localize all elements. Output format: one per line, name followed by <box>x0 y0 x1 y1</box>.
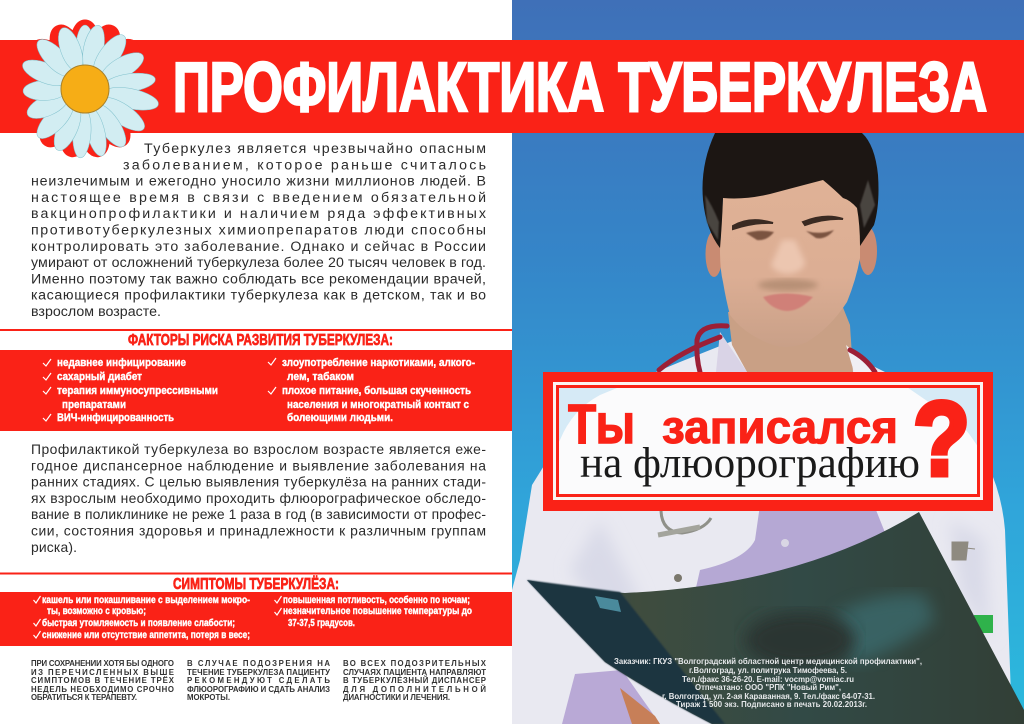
imprint footer: Тел./факс 36-26-20. E-mail: vocmp@vomiac.ru <box>682 675 854 684</box>
risk factors right column: лем, табаком <box>287 371 354 383</box>
advice column 2: В СЛУЧАЕ ПОДОЗРЕНИЯ НА <box>187 659 330 668</box>
hair highlight <box>705 180 875 240</box>
prevention text block: годное диспансерное наблюдение и выявление заболевания на <box>31 457 486 473</box>
symptoms right column: повышенная потливость, особенно по ночам; <box>283 594 470 606</box>
face <box>720 170 860 347</box>
prevention text block: сии, состояния здоровья и принадлежности к различным группам <box>31 522 486 538</box>
intro text block: настоящее время в связи с введением обязательной <box>31 190 486 206</box>
imprint footer <box>614 657 922 709</box>
film label <box>595 596 621 612</box>
risk factors right column <box>282 357 475 424</box>
eye left <box>746 231 774 240</box>
risk factors left column: сахарный диабет <box>57 371 143 383</box>
shirt button <box>781 539 789 547</box>
ear left <box>706 231 722 277</box>
doctor photo illustration <box>512 133 1024 724</box>
header band <box>0 40 1024 133</box>
x-ray ribs <box>835 594 935 665</box>
prevention text block <box>31 441 486 555</box>
nose <box>771 240 805 274</box>
icon: daisy <box>19 23 160 158</box>
symptoms right column: 37-37,5 градусов. <box>288 617 355 629</box>
hair <box>702 133 878 248</box>
daisy petals <box>19 23 160 158</box>
prevention text block: Профилактикой туберкулеза во взрослом возрасте является еже- <box>31 441 486 457</box>
moustache shade <box>758 279 818 291</box>
symptoms left column: быстрая утомляемость и появление слабости; <box>42 617 235 629</box>
right blue background <box>512 0 1024 724</box>
hand <box>620 688 660 724</box>
intro text block: заболеванием, которое раньше считалось <box>123 157 486 173</box>
risk factors right column: злоупотребление наркотиками, алкого- <box>282 357 475 369</box>
imprint footer: Тираж 1 500 экз. Подписано в печать 20.02.2013г. <box>676 700 867 709</box>
imprint footer: Заказчик: ГКУЗ "Волгоградский областной центр медицинской профилактики", <box>614 657 922 666</box>
intro text block: вакцинопрофилактики и наличием ряда эффективных <box>31 206 486 222</box>
symptoms left column: ты, возможно с кровью; <box>47 605 146 617</box>
green badge <box>974 615 993 633</box>
advice column 1: ИЗ ПЕРЕЧИСЛЕННЫХ ВЫШЕ <box>31 668 174 677</box>
intro text block: Туберкулез является чрезвычайно опасным <box>144 141 486 157</box>
eye right <box>806 230 834 238</box>
intro text block: Именно поэтому так важно соблюдать все рекомендации врачей, <box>31 271 486 287</box>
eyebrow right <box>803 217 843 225</box>
risk factors right column: плохое питание, большая скученность <box>282 385 471 397</box>
callout frame <box>543 372 993 511</box>
daisy centre <box>61 65 109 113</box>
x-ray fold <box>527 580 725 724</box>
advice column 2: ФЛЮОРОГРАФИЮ И СДАТЬ АНАЛИЗ <box>187 685 330 694</box>
prevention text block: риска). <box>31 539 77 555</box>
intro text block: противотуберкулезных химиопрепаратов люди способны <box>31 222 486 238</box>
advice column 1: ПРИ СОХРАНЕНИИ ХОТЯ БЫ ОДНОГО <box>31 659 174 668</box>
panel: symptoms <box>0 592 512 646</box>
callout question mark: ? <box>913 381 970 498</box>
stethoscope chest piece <box>658 511 711 535</box>
intro text block <box>31 141 486 320</box>
prevention text block: ях взрослым необходимо проходить флюорографическое обследо- <box>31 490 486 506</box>
prevention text block: ранних стадиях. С целью выявления туберкулёза на ранних стади- <box>31 474 486 490</box>
risk factors left column: ВИЧ-инфицированность <box>57 412 174 424</box>
advice column 2: ТЕЧЕНИЕ ТУБЕРКУЛЕЗА ПАЦИЕНТУ <box>187 668 330 677</box>
stethoscope tubes <box>659 326 875 372</box>
symptoms heading: СИМПТОМЫ ТУБЕРКУЛЁЗА: <box>173 576 339 593</box>
prevention text block: вание в поликлинике не реже 1 раза в год (в зависимости от профес- <box>31 506 486 522</box>
risk factors right column: населения и многократный контакт с <box>287 399 469 411</box>
coat button <box>674 574 682 582</box>
callout: fluorography <box>543 372 993 511</box>
imprint footer: г.Волгоград, ул. политрука Тимофеева, 5. <box>689 666 847 675</box>
advice column 2: РЕКОМЕНДУЮТ СДЕЛАТЬ <box>187 676 330 685</box>
pocket pen <box>952 542 975 560</box>
symptoms left column: снижение или отсутствие аппетита, потеря в весе; <box>42 629 250 641</box>
intro text block: контролировать это заболевание. Однако и сейчас в России <box>31 239 486 255</box>
advice column 3: СЛУЧАЯХ ПАЦИЕНТА НАПРАВЛЯЮТ <box>343 668 486 677</box>
symptoms top line <box>0 572 512 574</box>
panel: risk factors <box>0 350 512 431</box>
advice column 2: МОКРОТЫ. <box>187 693 230 702</box>
symptoms right column: незначительное повышение температуры до <box>283 605 472 617</box>
x-ray film <box>527 512 1024 724</box>
shirt collar left <box>716 332 747 372</box>
callout text на флюорографию: на флюорографию <box>580 440 920 487</box>
symptoms check marks <box>34 596 282 638</box>
eyebrow left <box>733 220 773 229</box>
neck <box>728 300 853 372</box>
mouth <box>763 294 813 311</box>
intro text block: неизлечимым и ежегодно уносило жизни миллионов людей. В <box>31 174 486 190</box>
advice column 1: НЕДЕЛЬ НЕОБХОДИМО СРОЧНО <box>31 685 174 694</box>
intro text block: взрослом возрасте. <box>31 304 161 320</box>
daisy red halo <box>20 25 150 154</box>
symptoms right column <box>283 594 472 629</box>
advice column 1: ОБРАТИТЬСЯ К ТЕРАПЕВТУ. <box>31 693 137 702</box>
callout text Ты: Ты <box>568 392 635 455</box>
risk factors left column: недавнее инфицирование <box>57 357 186 369</box>
callout thin red line <box>556 385 980 497</box>
advice column 3: ВО ВСЕХ ПОДОЗРИТЕЛЬНЫХ <box>343 659 487 668</box>
intro text block: касающиеся профилактики туберкулеза как в детском, так и во <box>31 288 486 304</box>
callout text записался: записался <box>662 401 898 453</box>
sleeve <box>562 670 660 724</box>
symptoms left column: кашель или покашливание с выделением мокро- <box>42 594 250 606</box>
coat <box>512 340 1012 724</box>
advice column 3 <box>343 659 487 702</box>
advice column 3: ДИАГНОСТИКИ И ЛЕЧЕНИЯ. <box>343 693 450 702</box>
imprint footer: Отпечатано: ООО "РПК "Новый Рим", <box>695 683 841 692</box>
advice column 2 <box>187 659 330 702</box>
advice column 1 <box>31 659 175 702</box>
risk factors top line <box>0 329 512 331</box>
coat collar right <box>846 345 876 372</box>
risk factors left column <box>57 357 218 424</box>
advice column 3: ДЛЯ ДОПОЛНИТЕЛЬНОЙ <box>343 685 486 694</box>
callout translucent panel <box>559 388 977 494</box>
symptoms left column <box>42 594 250 641</box>
ear right <box>859 227 877 275</box>
advice column 3: В ТУБЕРКУЛЕЗНЫЙ ДИСПАНСЕР <box>343 676 486 685</box>
advice column 1: СИМПТОМОВ В ТЕЧЕНИЕ ТРЁХ <box>31 676 175 685</box>
imprint footer: г. Волгоград, ул. 2-ая Караванная, 9. Тел./факс 64-07-31. <box>662 692 875 701</box>
risk factors right column: болеющими людьми. <box>287 412 393 424</box>
callout white band <box>553 382 983 500</box>
intro text block: умирают от осложнений туберкулеза более 20 тысяч человек в год. <box>31 255 486 271</box>
risk factors check marks <box>43 358 276 421</box>
x-ray dark heart <box>745 612 855 668</box>
risk factors left column: препаратами <box>62 399 126 411</box>
risk factors heading: ФАКТОРЫ РИСКА РАЗВИТИЯ ТУБЕРКУЛЕЗА: <box>128 332 393 349</box>
shirt <box>695 505 892 592</box>
left white page <box>0 0 512 724</box>
risk factors left column: терапия иммуносупрессивными <box>57 385 218 397</box>
coat shading <box>574 529 988 615</box>
